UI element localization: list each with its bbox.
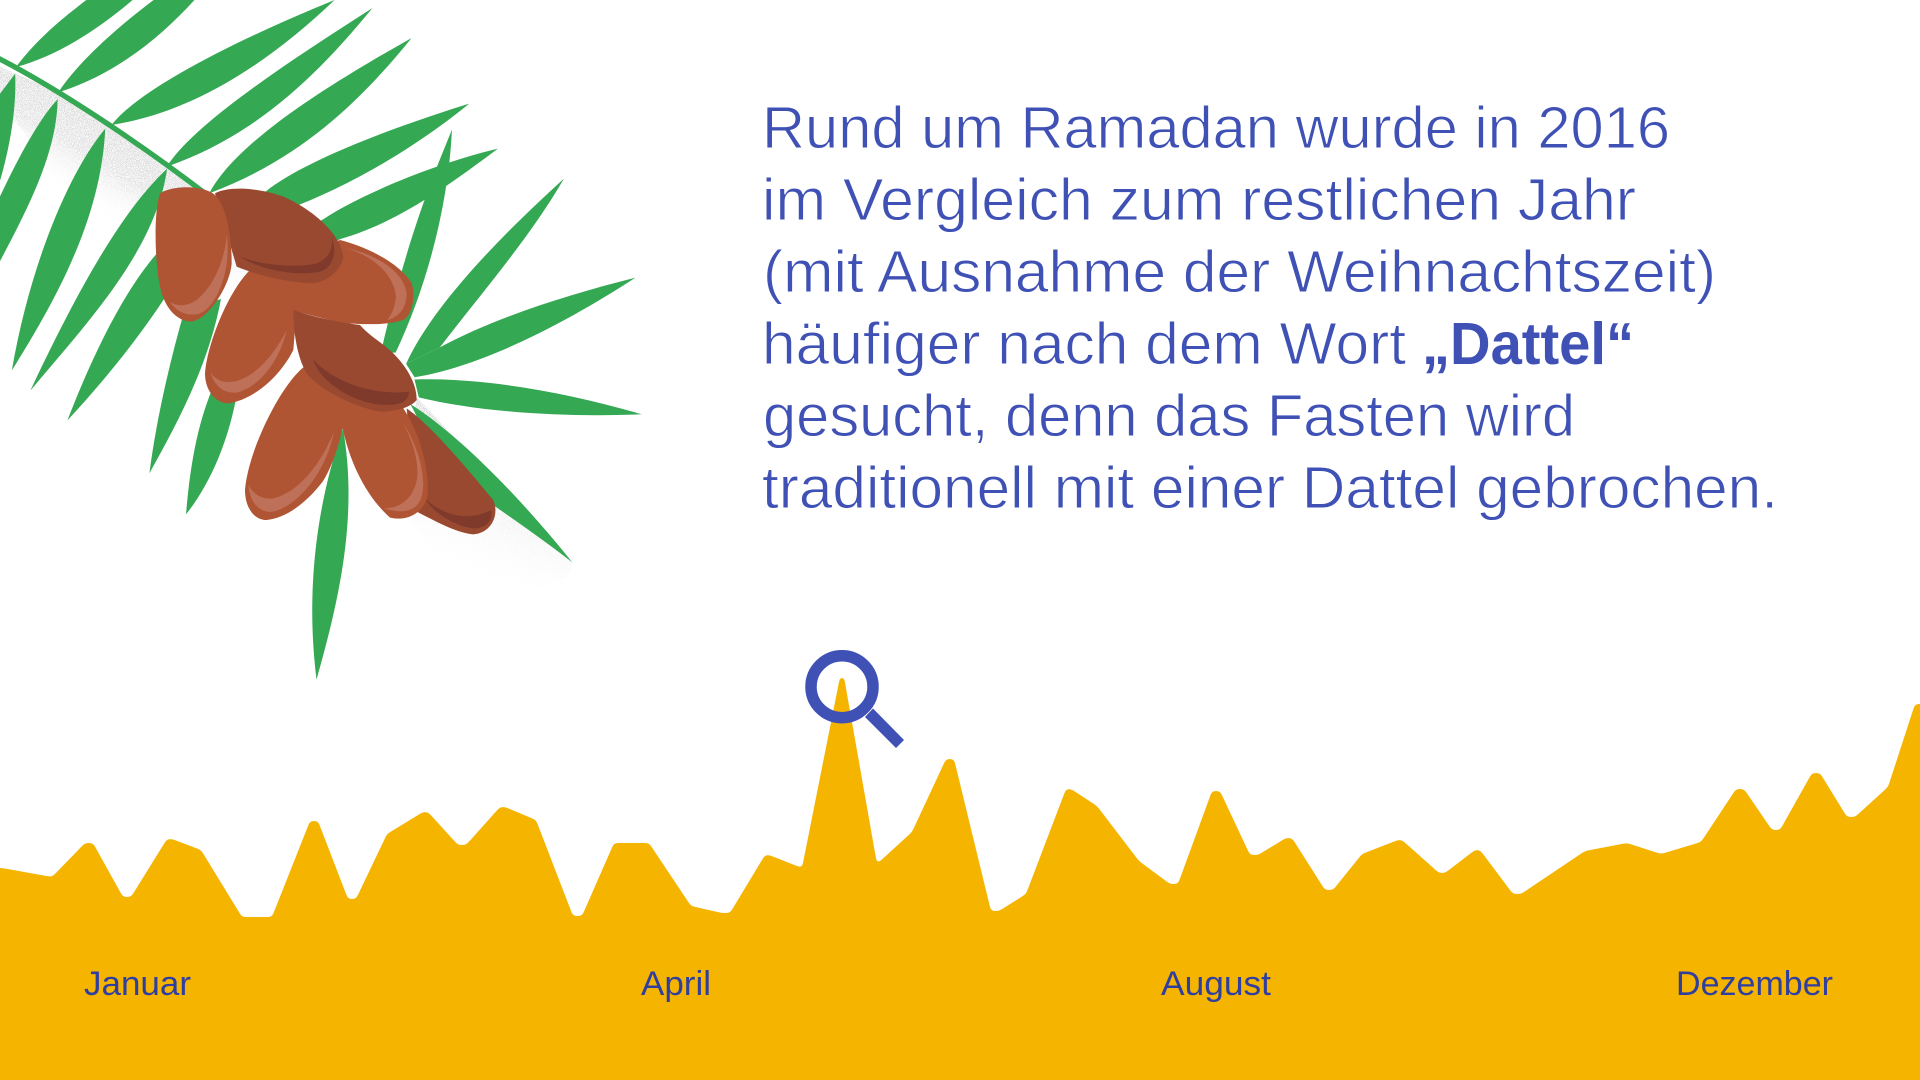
label: April: April	[641, 965, 711, 1003]
date: upper right	[250, 240, 413, 324]
date: top left	[156, 187, 232, 322]
text block: Ramadan explanation: häufiger nach dem Wort	[762, 311, 1406, 377]
date: middle left	[205, 270, 300, 403]
icon: magnifying glass	[811, 656, 904, 748]
date: centre dark	[293, 310, 417, 412]
text block: Ramadan explanation: Rund um Ramadan wurde in 2016	[762, 95, 1670, 161]
branch rib	[0, 58, 206, 194]
illustration: cluster of dates	[156, 187, 495, 534]
shadow under branch	[0, 67, 572, 589]
date: bottom right	[327, 383, 428, 519]
text block: Ramadan explanation: „Dattel“	[1422, 311, 1634, 377]
text block: Ramadan explanation: im Vergleich zum restlichen Jahr	[762, 167, 1636, 233]
date: top dark	[215, 189, 343, 283]
text block: Ramadan explanation	[762, 95, 1778, 521]
month labels	[84, 965, 1833, 1003]
illustration: palm branch	[0, 0, 642, 679]
date: lower right dark	[407, 408, 495, 534]
text block: Ramadan explanation: gesucht, denn das Fasten wird	[763, 383, 1575, 449]
label: Dezember: Dezember	[1676, 965, 1833, 1003]
label: August: August	[1161, 965, 1272, 1003]
text block: Ramadan explanation: (mit Ausnahme der Weihnachtszeit)	[763, 239, 1716, 305]
date: bottom left	[245, 367, 353, 520]
palm leaves	[0, 0, 642, 679]
text block: Ramadan explanation: traditionell mit einer Dattel gebrochen.	[762, 455, 1778, 521]
search trend area chart	[0, 677, 1920, 1080]
label: Januar: Januar	[84, 965, 191, 1003]
